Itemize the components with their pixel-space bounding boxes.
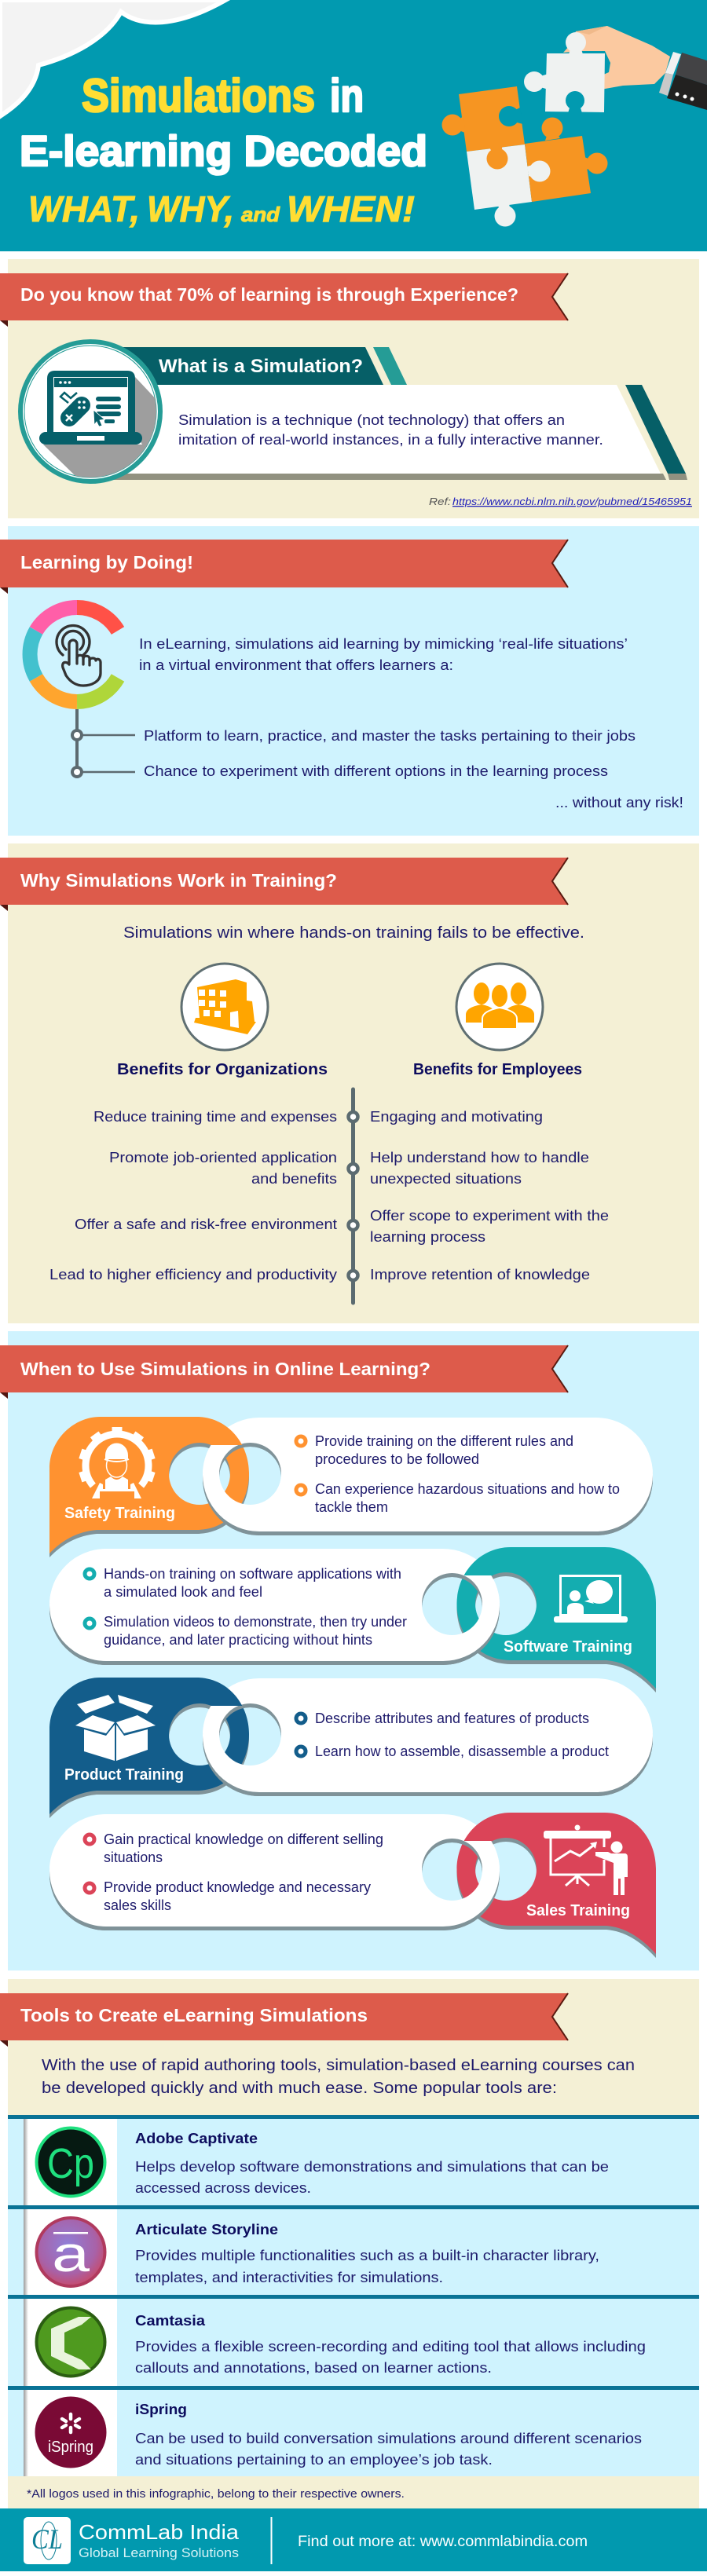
subtitle: WHEN! bbox=[287, 188, 415, 229]
label: Software Training bbox=[504, 1638, 632, 1656]
sales text: situations bbox=[104, 1850, 163, 1865]
description bbox=[135, 2131, 609, 2196]
logo: commlab: CL bbox=[31, 2523, 63, 2555]
description: and situations pertaining to an employee’s job task. bbox=[135, 2452, 493, 2468]
logo: captivate bbox=[36, 2128, 105, 2196]
ribbon heading: Do you know that 70% of learning is through Experience? bbox=[20, 284, 518, 305]
tool: ispring bbox=[35, 2397, 642, 2468]
benefits list: Chance to experiment with different options in the learning process bbox=[144, 763, 608, 779]
intro sentence: Simulations win where hands-on training fails to be effective. bbox=[123, 924, 584, 942]
ribbon heading: Learning by Doing! bbox=[20, 552, 193, 573]
icon: employees group bbox=[456, 964, 543, 1050]
description bbox=[135, 2222, 599, 2285]
panel: tools bbox=[0, 1979, 699, 2508]
label: Product Training bbox=[64, 1766, 184, 1784]
benefits list: ... without any risk! bbox=[555, 795, 683, 810]
safety training block bbox=[49, 1417, 653, 1557]
sales text bbox=[104, 1831, 383, 1913]
safety text: procedures to be followed bbox=[315, 1451, 479, 1467]
footnote: *All logos used in this infographic, belong to their respective owners. bbox=[27, 2488, 405, 2501]
connector with nodes bbox=[72, 709, 135, 777]
icon: laptop medallion bbox=[18, 339, 163, 491]
tool: adobe captivate bbox=[36, 2128, 609, 2196]
icon: presenter at chart bbox=[544, 1825, 628, 1895]
icon: colored ring with touch hand bbox=[30, 607, 118, 702]
description: accessed across devices. bbox=[135, 2180, 311, 2196]
title: in bbox=[330, 70, 364, 122]
cloud decoration bbox=[0, 0, 225, 116]
tool: camtasia bbox=[36, 2307, 646, 2377]
intro text: With the use of rapid authoring tools, simulation-based eLearning courses can bbox=[42, 2057, 635, 2074]
software text: a simulated look and feel bbox=[104, 1584, 262, 1600]
safety text: Provide training on the different rules and bbox=[315, 1433, 573, 1449]
header banner bbox=[0, 0, 707, 251]
logo: commlab bbox=[24, 2517, 71, 2564]
organization benefits: and benefits bbox=[251, 1171, 337, 1187]
description: templates, and interactivities for simulations. bbox=[135, 2270, 443, 2285]
icon: gear and worker bbox=[79, 1427, 156, 1498]
organization benefits: Promote job-oriented application bbox=[109, 1150, 337, 1165]
sales training block bbox=[49, 1813, 656, 1958]
product training block bbox=[49, 1678, 653, 1818]
description: callouts and annotations, based on learner actions. bbox=[135, 2360, 492, 2376]
description bbox=[135, 2313, 646, 2376]
sales text: Gain practical knowledge on different selling bbox=[104, 1831, 383, 1847]
brand text: CommLab India bbox=[79, 2520, 240, 2544]
intro text: In eLearning, simulations aid learning by mimicking ‘real-life situations’ bbox=[139, 636, 628, 652]
safety text bbox=[315, 1433, 620, 1515]
ribbon heading bbox=[0, 858, 568, 911]
employee benefits: Engaging and motivating bbox=[370, 1109, 543, 1125]
panel: what is a simulation bbox=[0, 259, 699, 518]
column headings bbox=[117, 1061, 582, 1078]
panel: why simulations work bbox=[0, 843, 699, 1323]
icon: monitor with presenter bbox=[554, 1575, 628, 1623]
logo: storyline: a bbox=[52, 2226, 90, 2282]
bullets bbox=[85, 1835, 94, 1893]
intro text: in a virtual environment that offers learners a: bbox=[139, 657, 453, 673]
logo: ispring: iSpring bbox=[48, 2439, 93, 2456]
central timeline bbox=[349, 1089, 358, 1303]
icon: open box bbox=[75, 1695, 156, 1761]
software text bbox=[104, 1566, 407, 1648]
organization benefits: Lead to higher efficiency and productivity bbox=[49, 1267, 337, 1283]
logo: ispring bbox=[35, 2397, 107, 2468]
subtitle bbox=[28, 188, 415, 229]
logo: camtasia bbox=[36, 2307, 105, 2377]
employee benefits: Help understand how to handle bbox=[370, 1150, 589, 1165]
description: Camtasia bbox=[135, 2313, 206, 2329]
reference link: https://www.ncbi.nlm.nih.gov/pubmed/15465951 bbox=[452, 496, 692, 507]
bullets bbox=[296, 1714, 306, 1756]
organization benefits: Offer a safe and risk-free environment bbox=[75, 1217, 337, 1232]
ribbon heading: Tools to Create eLearning Simulations bbox=[20, 2005, 368, 2025]
safety text: tackle them bbox=[315, 1499, 388, 1515]
organization benefits: Reduce training time and expenses bbox=[93, 1109, 337, 1125]
brand text: Global Learning Solutions bbox=[79, 2545, 239, 2560]
product text: Describe attributes and features of products bbox=[315, 1711, 589, 1726]
title: Simulations bbox=[82, 70, 315, 122]
label: Safety Training bbox=[64, 1505, 175, 1522]
description bbox=[135, 2402, 642, 2468]
product text bbox=[315, 1711, 609, 1759]
intro text bbox=[42, 2057, 635, 2097]
software text: Hands-on training on software applications with bbox=[104, 1566, 401, 1582]
tool rows background bbox=[8, 2115, 699, 2476]
website: Find out more at: www.commlabindia.com bbox=[298, 2534, 588, 2550]
ribbon heading: When to Use Simulations in Online Learning? bbox=[20, 1359, 430, 1379]
bullets bbox=[85, 1569, 94, 1628]
benefits list bbox=[144, 728, 683, 810]
ribbon heading: Why Simulations Work in Training? bbox=[20, 870, 337, 891]
title: E-learning Decoded bbox=[20, 126, 427, 175]
definition card: Simulation is a technique (not technology) that offers an bbox=[178, 412, 565, 428]
description: Can be used to build conversation simulations around different scenarios bbox=[135, 2431, 642, 2446]
subtitle: WHAT, bbox=[28, 188, 140, 229]
definition card: What is a Simulation? bbox=[159, 356, 363, 377]
definition card bbox=[112, 347, 687, 480]
sales text: Provide product knowledge and necessary bbox=[104, 1879, 371, 1895]
ribbon heading bbox=[0, 273, 568, 327]
description: Adobe Captivate bbox=[135, 2131, 258, 2146]
organization benefits bbox=[49, 1109, 337, 1283]
footer bbox=[0, 2508, 707, 2571]
reference link: Ref: bbox=[429, 496, 451, 507]
product text: Learn how to assemble, disassemble a product bbox=[315, 1744, 609, 1759]
definition card: imitation of real-world instances, in a fully interactive manner. bbox=[178, 432, 603, 448]
icon: organization building bbox=[181, 964, 268, 1050]
employee benefits: Offer scope to experiment with the bbox=[370, 1208, 609, 1224]
employee benefits: unexpected situations bbox=[370, 1171, 522, 1187]
label: Sales Training bbox=[526, 1902, 630, 1919]
description: iSpring bbox=[135, 2402, 187, 2417]
bullets bbox=[296, 1436, 306, 1495]
logo: storyline bbox=[36, 2218, 105, 2286]
column headings: Benefits for Organizations bbox=[117, 1061, 328, 1078]
panel: learning by doing bbox=[0, 526, 699, 836]
brand text bbox=[79, 2520, 240, 2560]
title bbox=[20, 70, 427, 175]
description: Articulate Storyline bbox=[135, 2222, 278, 2238]
column headings: Benefits for Employees bbox=[413, 1061, 582, 1078]
employee benefits bbox=[370, 1109, 609, 1283]
description: Helps develop software demonstrations and simulations that can be bbox=[135, 2159, 609, 2175]
sales text: sales skills bbox=[104, 1897, 171, 1913]
subtitle: and bbox=[241, 203, 280, 226]
tool: articulate storyline bbox=[36, 2218, 599, 2286]
subtitle: WHY, bbox=[147, 188, 234, 229]
icon: puzzle pieces and hand bbox=[441, 26, 707, 226]
software training block bbox=[49, 1547, 656, 1692]
ribbon heading bbox=[0, 1345, 568, 1399]
description: Provides a flexible screen-recording and editing tool that allows including bbox=[135, 2339, 646, 2355]
description: Provides multiple functionalities such as a built-in character library, bbox=[135, 2248, 599, 2263]
employee benefits: Improve retention of knowledge bbox=[370, 1267, 590, 1283]
ribbon heading bbox=[0, 1993, 568, 2047]
software text: Simulation videos to demonstrate, then try under bbox=[104, 1614, 407, 1630]
software text: guidance, and later practicing without hints bbox=[104, 1632, 372, 1648]
intro text: be developed quickly and with much ease. Some popular tools are: bbox=[42, 2080, 557, 2097]
logo: captivate: Cp bbox=[47, 2140, 94, 2187]
intro text bbox=[139, 636, 628, 673]
benefits list: Platform to learn, practice, and master the tasks pertaining to their jobs bbox=[144, 728, 636, 744]
panel: when to use simulations bbox=[0, 1331, 699, 1970]
ribbon heading bbox=[0, 540, 568, 594]
safety text: Can experience hazardous situations and how to bbox=[315, 1481, 620, 1497]
employee benefits: learning process bbox=[370, 1229, 485, 1245]
